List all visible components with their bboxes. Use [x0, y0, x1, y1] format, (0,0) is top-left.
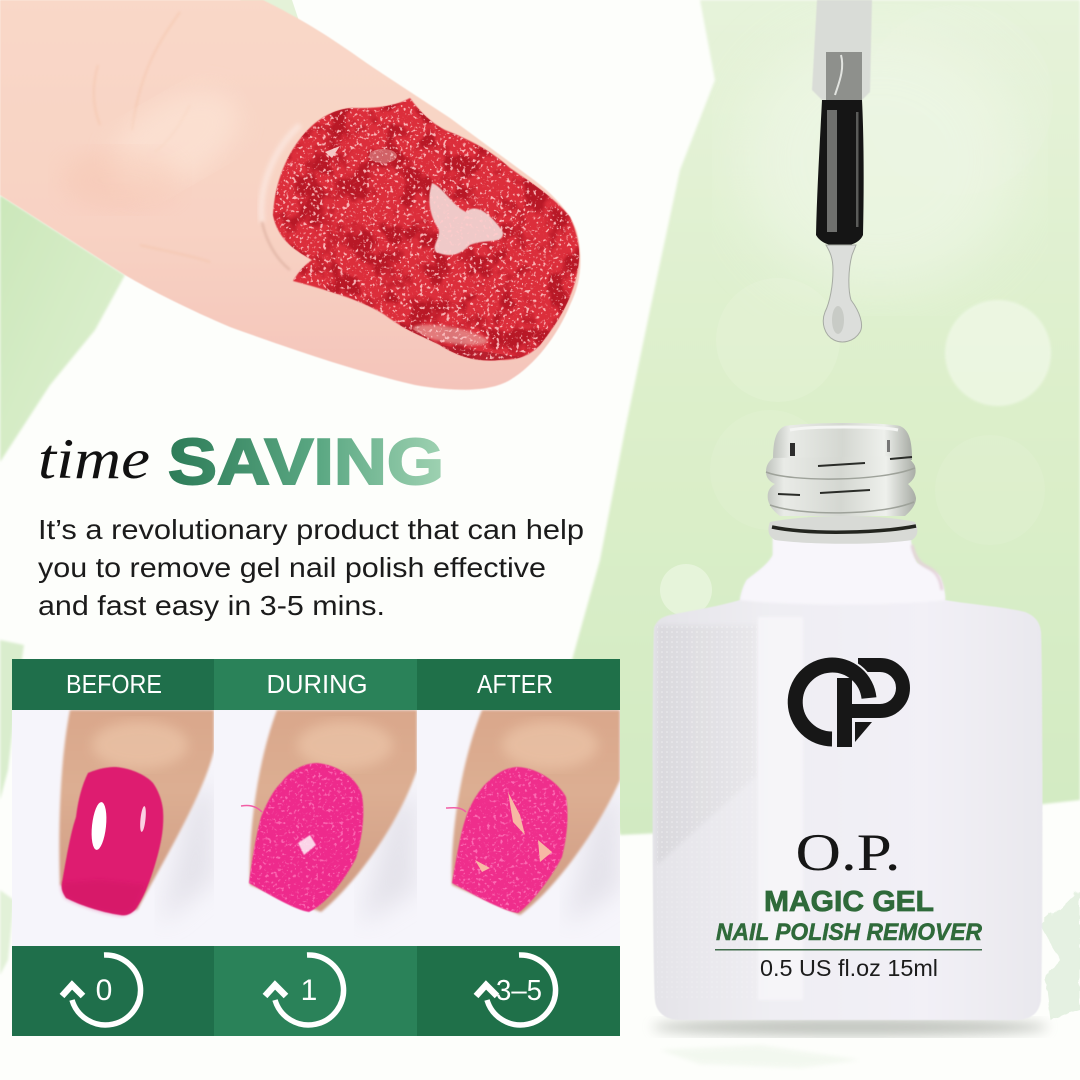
column labels: AFTER — [477, 669, 553, 699]
description text — [38, 514, 584, 621]
bokeh bubbles — [660, 5, 1053, 616]
photo: finger with peeling red gel — [0, 0, 585, 390]
brush with droplet — [812, 0, 872, 342]
bottle shadow — [652, 1018, 1048, 1036]
column labels: DURING — [266, 669, 368, 699]
photo: before — [59, 710, 214, 925]
knuckle creases — [94, 12, 210, 262]
column labels — [66, 669, 553, 699]
bottle wordmark: MAGIC GEL — [764, 886, 934, 918]
timer icon: 0: 0 — [96, 974, 112, 1007]
before during after comparison table — [12, 659, 620, 1036]
glass bottle cap — [766, 423, 917, 544]
product bottle — [652, 423, 1048, 1036]
title: SAVING — [168, 425, 444, 498]
title — [38, 425, 444, 498]
description text: and fast easy in 3-5 mins. — [38, 590, 385, 621]
bottle wordmark: O.P. — [796, 824, 900, 882]
bottle neck and body — [653, 535, 1042, 1020]
photo: after — [446, 710, 620, 925]
bottle wordmark: NAIL POLISH REMOVER — [716, 919, 983, 946]
bottle wordmark: 0.5 US fl.oz 15ml — [760, 955, 938, 981]
timer icon: 1 — [265, 955, 344, 1025]
column labels: BEFORE — [66, 669, 162, 699]
timer icon: 3-5: 3–5 — [496, 975, 542, 1007]
timer icon: 3-5 — [476, 955, 556, 1025]
O.P. logo — [795, 657, 903, 747]
timer icon: 1: 1 — [301, 974, 317, 1007]
bottle wordmark — [715, 824, 983, 981]
timer icon: 0 — [62, 955, 141, 1025]
description text: you to remove gel nail polish effective — [38, 552, 546, 583]
photo: during — [241, 710, 417, 925]
description text: It’s a revolutionary product that can help — [38, 514, 584, 545]
finger — [0, 0, 581, 390]
red nail — [265, 90, 585, 370]
title: time — [38, 428, 150, 491]
bottle reflections — [657, 617, 803, 1000]
